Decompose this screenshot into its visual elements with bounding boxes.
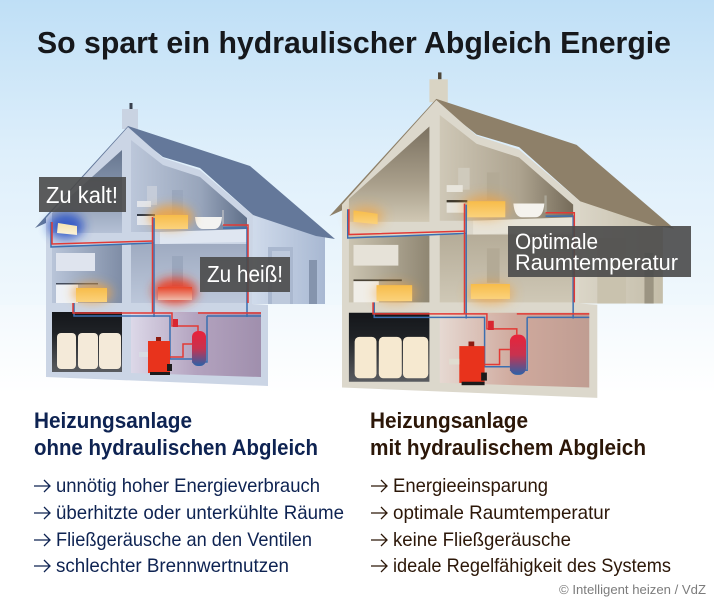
side wall <box>250 214 325 304</box>
list: without balancing: überhitzte oder unterkühlte Räume <box>56 502 344 524</box>
heading: without balancing: ohne hydraulischen Abgleich <box>34 435 318 460</box>
basement storage room <box>349 313 429 382</box>
hot water tank <box>192 331 206 366</box>
blue return pipes <box>51 218 261 362</box>
house with hydraulic balancing <box>329 72 674 398</box>
cold radiator <box>57 223 77 235</box>
warm radiator upstairs <box>155 215 188 229</box>
glow: cold radiator <box>48 213 84 239</box>
basement storage room <box>52 312 122 372</box>
chimney <box>122 103 138 129</box>
chimney <box>429 72 448 102</box>
oil tanks <box>57 333 121 369</box>
label: Optimale Raumtemperatur: Raumtemperatur <box>515 250 678 275</box>
list: without balancing: schlechter Brennwertnutzen <box>56 555 289 577</box>
heading: without balancing: Heizungsanlage <box>34 408 192 433</box>
ground area <box>0 305 714 600</box>
list: with balancing: optimale Raumtemperatur <box>393 502 610 524</box>
title: So spart ein hydraulischer Abgleich Energie <box>37 25 671 60</box>
ground floor right room <box>131 244 247 303</box>
radiator downstairs right <box>471 284 510 299</box>
red flow pipes <box>349 204 589 364</box>
list: without balancing <box>34 475 344 577</box>
heading: with balancing <box>370 408 646 460</box>
heading: with balancing: Heizungsanlage <box>370 408 528 433</box>
radiator downstairs left <box>376 285 412 301</box>
arrows <box>371 480 387 572</box>
upper floor slab <box>160 229 247 244</box>
boiler <box>449 342 487 385</box>
upper floor slab <box>473 217 573 235</box>
side wall <box>577 200 663 304</box>
background sky <box>0 0 714 306</box>
list: with balancing: Energieeinsparung <box>393 475 548 497</box>
roof <box>35 126 335 239</box>
basement heating room <box>131 312 261 377</box>
attic left room <box>349 126 429 222</box>
glow: radiators <box>349 195 513 304</box>
attic left room <box>52 150 122 233</box>
house section walls <box>342 100 597 398</box>
pump <box>488 321 494 330</box>
heading: with balancing: mit hydraulischem Abgleich <box>370 435 646 460</box>
label: Zu kalt <box>39 177 126 212</box>
list: with balancing <box>371 475 671 577</box>
ground floor left room <box>349 236 429 302</box>
list: with balancing: keine Fließgeräusche <box>393 529 571 551</box>
boiler <box>139 337 172 375</box>
list: without balancing: unnötig hoher Energieverbrauch <box>56 475 320 497</box>
label: Zu heiss <box>200 257 290 292</box>
attic right room <box>131 140 247 232</box>
credit: © Intelligent heizen / VdZ <box>559 582 706 597</box>
roof <box>329 99 674 229</box>
blue return pipes <box>348 205 589 370</box>
attic right room <box>440 115 573 221</box>
overheated radiator <box>158 287 192 300</box>
glow: warm radiators <box>72 205 197 304</box>
warm radiator downstairs <box>76 288 107 302</box>
label: Zu kalt: Zu kalt! <box>46 182 118 208</box>
oil tanks <box>355 337 428 378</box>
pump <box>173 319 178 327</box>
label: Zu heiss: Zu heiß! <box>207 261 283 287</box>
ground floor right room <box>440 235 573 302</box>
house without hydraulic balancing <box>35 103 335 386</box>
furniture <box>354 168 547 302</box>
house section walls <box>46 127 268 386</box>
label: Optimale Raumtemperatur: Optimale <box>515 229 598 254</box>
list: without balancing: Fließgeräusche an den Ventilen <box>56 529 312 551</box>
radiator upstairs <box>467 201 505 217</box>
furniture <box>56 186 224 303</box>
arrows <box>34 480 50 572</box>
list: with balancing: ideale Regelfähigkeit des Systems <box>393 555 671 577</box>
radiator attic left <box>354 210 378 224</box>
label: Optimale Raumtemperatur <box>508 226 691 277</box>
hot water tank <box>510 335 526 375</box>
basement heating room <box>440 313 589 388</box>
heading: without balancing <box>34 408 318 460</box>
ground floor left room <box>52 245 122 303</box>
red flow pipes <box>52 217 261 357</box>
